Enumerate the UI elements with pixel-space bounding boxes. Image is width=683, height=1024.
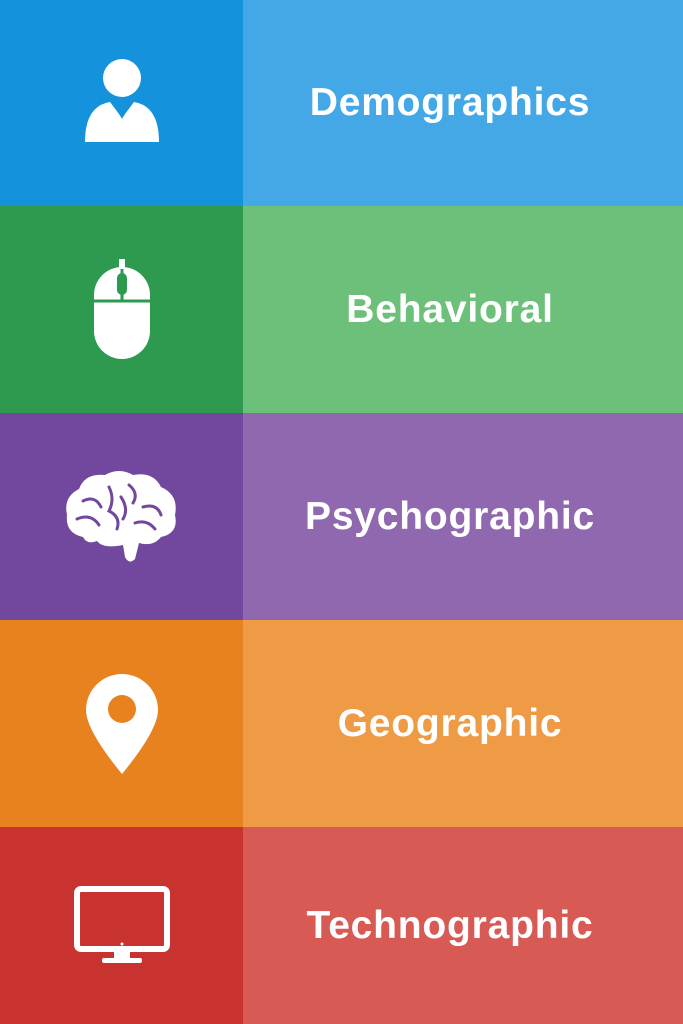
panel: geographic [0,620,683,827]
label: Psychographic [243,413,683,620]
panel: demographics [0,0,683,206]
label: Geographic [243,620,683,827]
label: Geographic: Geographic [338,702,562,744]
label: Technographic: Technographic [306,904,594,946]
icon: map pin [0,620,243,827]
label: Demographics: Demographics [310,81,590,124]
panel: technographic [0,827,683,1024]
label: Psychographic: Psychographic [305,494,595,538]
label: Demographics [243,0,683,206]
icon: mouse [0,206,243,413]
panel: psychographic [0,413,683,620]
label: Behavioral [243,206,683,413]
icon: person [0,0,243,206]
icon: monitor [0,827,243,1024]
icon: brain [0,413,243,620]
label: Behavioral: Behavioral [346,288,554,330]
label: Technographic [243,827,683,1024]
panel: behavioral [0,206,683,413]
